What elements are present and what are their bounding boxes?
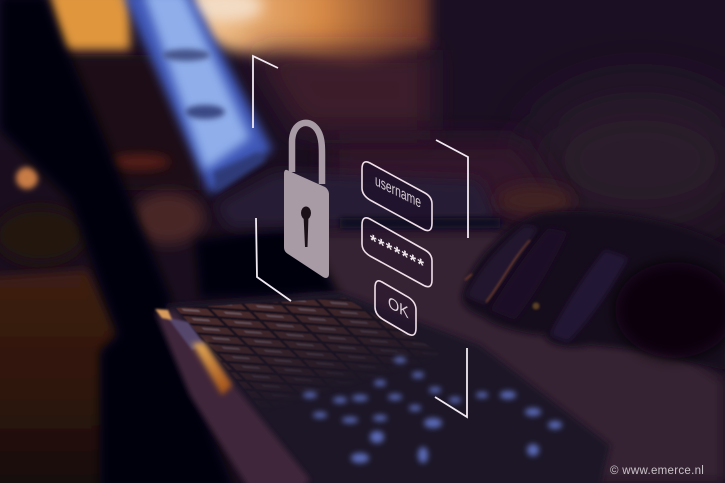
username field xyxy=(362,162,432,231)
label: OK: OK xyxy=(388,293,409,323)
keyboard xyxy=(176,298,562,463)
icon: padlock xyxy=(284,123,329,278)
laptop edge with orange reflection xyxy=(155,309,310,483)
second laptop base xyxy=(215,172,573,228)
label: masked password: ******* xyxy=(370,230,424,276)
second laptop screen xyxy=(122,0,272,194)
dark object behind lock xyxy=(195,225,340,298)
corner bracket: bottom right xyxy=(435,348,467,417)
left desk with reddish blobs xyxy=(0,154,204,483)
OK button xyxy=(375,281,416,335)
corner bracket: bottom left xyxy=(256,218,291,301)
watermark credit: © www.emerce.nl xyxy=(610,465,704,477)
hand xyxy=(462,211,725,370)
orange background glow xyxy=(48,0,430,130)
laptop deck xyxy=(165,292,610,483)
label: username: username xyxy=(375,172,421,212)
corner bracket: top right xyxy=(436,140,468,238)
dark left wall xyxy=(50,55,200,190)
password field xyxy=(362,218,432,287)
corner bracket: top left xyxy=(253,56,278,128)
foreground laptop lid (dark) xyxy=(0,0,235,483)
